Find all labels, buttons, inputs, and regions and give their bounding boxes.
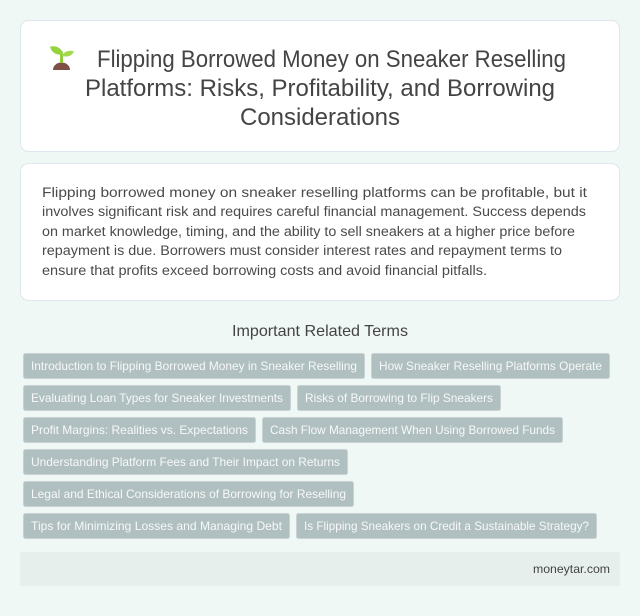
tag: Tips for Minimizing Losses and Managing Debt [31,519,283,533]
text block: summary paragraph [42,185,587,279]
footer bar: moneytar.com [533,562,610,576]
footer bar [20,552,620,586]
text block: summary paragraph: on market knowledge, timing, and the ability to sell sneakers at a higher price before [42,224,575,240]
tag [262,418,562,442]
tag [24,482,354,506]
tag: Introduction to Flipping Borrowed Money in Sneaker Reselling [31,359,357,373]
icon: seedling [50,46,74,70]
tag: Profit Margins: Realities vs. Expectations [31,423,248,437]
tag [372,354,610,378]
heading: related terms: Important Related Terms [232,323,408,340]
title: Flipping Borrowed Money on Sneaker Reselling [97,46,566,73]
tag: How Sneaker Reselling Platforms Operate [379,359,602,373]
tag: Legal and Ethical Considerations of Borrowing for Reselling [31,487,346,501]
title: Platforms: Risks, Profitability, and Borrowing [85,75,555,102]
tag [296,514,596,538]
title: Considerations [240,104,400,131]
tag: Understanding Platform Fees and Their Impact on Returns [31,455,340,469]
tag: Is Flipping Sneakers on Credit a Sustainable Strategy? [304,519,589,533]
tag [298,386,500,410]
tag [24,450,348,474]
tag: Evaluating Loan Types for Sneaker Investments [31,391,283,405]
tag [24,514,290,538]
text block: summary paragraph: repayment is due. Borrowers must consider interest rates and repayment terms to [42,243,562,259]
tag: Risks of Borrowing to Flip Sneakers [305,391,493,405]
title [85,46,566,131]
tag list [24,354,610,538]
text block: summary paragraph: involves significant risk and requires careful financial management. Success depends [42,204,586,220]
tag [24,354,364,378]
panel: summary [20,164,620,300]
tag [24,418,256,442]
tag [24,386,290,410]
text block: summary paragraph: ensure that profits exceed borrowing costs and avoid financial pitfalls. [42,263,487,279]
panel: title card [20,20,620,152]
text block: summary paragraph: Flipping borrowed money on sneaker reselling platforms can be profitable, but it [42,185,587,201]
tag: Cash Flow Management When Using Borrowed Funds [270,423,555,437]
